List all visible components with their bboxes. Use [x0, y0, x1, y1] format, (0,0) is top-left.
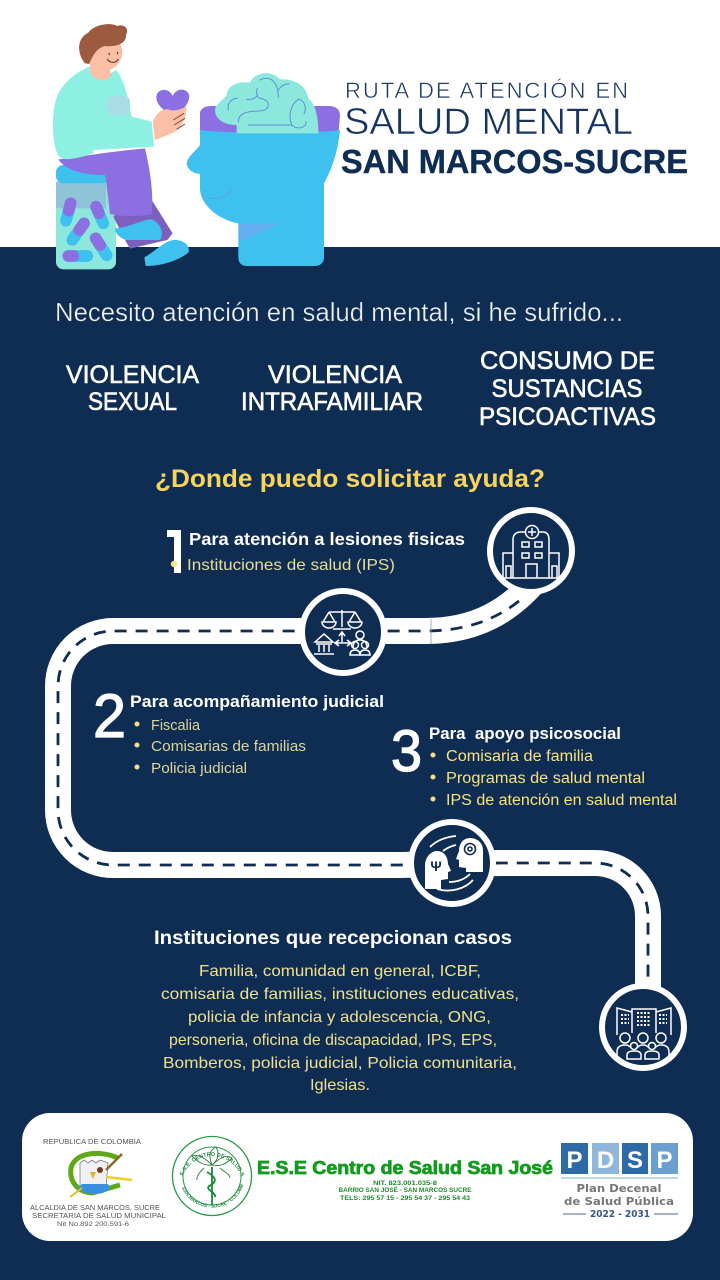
logo: PDSP: de Salud Pública [564, 1195, 674, 1208]
section: receiving institutions [154, 928, 519, 1094]
number 1 [167, 530, 181, 573]
section 2 list: Policia judicial [151, 760, 247, 777]
logo: centro de salud details: NIT. 823.001.035-8 [373, 1180, 437, 1187]
number 3: 3 [391, 719, 422, 784]
logo: centro de salud details: TELS: 295 57 15 - 295 54 37 - 295 54 43 [340, 1195, 470, 1202]
category: violencia sexual: VIOLENCIA [66, 361, 199, 389]
icon: hand [153, 107, 186, 140]
logo: PDSP: P [566, 1147, 583, 1174]
receiving institutions list: Familia, comunidad en general, ICBF, [199, 963, 481, 980]
logo: centro de salud seal: E.S.E. CENTRO DE SALUD SAN JOSÉ [180, 1152, 244, 1176]
section 2 list: Comisarias de familias [151, 738, 306, 755]
logo: PDSP: 2022 - 2031 [590, 1209, 650, 1220]
icon: brain [215, 73, 318, 133]
logo: alcaldia text bottom: Nit No.892 200.591-6 [57, 1221, 129, 1228]
icon: smile [107, 52, 118, 62]
icon: pill jar [56, 165, 116, 269]
section 2 list: Fiscalia [151, 717, 201, 734]
logo: alcaldia text top: REPUBLICA DE COLOMBIA [43, 1137, 141, 1146]
receiving institutions list: policia de infancia y adolescencia, ONG, [188, 1009, 491, 1026]
section 1 item: Instituciones de salud (IPS) [187, 557, 395, 574]
icon: hospital [490, 510, 572, 592]
logo: PDSP: Plan Decenal [576, 1182, 662, 1195]
receiving institutions list: Bomberos, policia judicial, Policia comunitaria, [163, 1055, 517, 1072]
section 3 list: Programas de salud mental [446, 770, 645, 787]
icon: neck shadow [238, 223, 278, 242]
road [58, 575, 648, 1030]
section 3 [391, 719, 677, 809]
section 3 heading: Para apoyo psicosocial [429, 725, 621, 743]
category: violencia sexual: SEXUAL [88, 388, 177, 416]
intro text: Necesito atención en salud mental, si he sufrido... [55, 297, 623, 327]
section 1 [167, 530, 464, 574]
logo: centro de salud seal [172, 1136, 252, 1216]
logo: PDSP [561, 1143, 678, 1220]
heading line 2: SALUD MENTAL [344, 100, 633, 142]
icon: psychology heads [411, 822, 493, 904]
receiving institutions list: Iglesias. [310, 1077, 370, 1094]
section 2 heading: Para acompañamiento judicial [130, 692, 384, 711]
logo: centro de salud name: E.S.E Centro de Salud San José [257, 1157, 553, 1178]
logo: PDSP: D [597, 1147, 614, 1174]
section 3 list: Comisaria de familia [446, 748, 593, 765]
category: violencia intrafamiliar [241, 361, 423, 416]
receiving institutions list: comisaria de familias, instituciones educativas, [161, 986, 519, 1003]
icon: head smile [205, 190, 232, 199]
icon: justice [302, 591, 384, 673]
heading: donde solicitar ayuda: ¿Donde puedo solicitar ayuda? [155, 465, 545, 493]
logo: alcaldia text bottom [30, 1203, 166, 1228]
logo: alcaldia text bottom: ALCALDIA DE SAN MARCOS, SUCRE [30, 1203, 160, 1212]
receiving institutions list [161, 963, 519, 1094]
receiving institutions list: personeria, oficina de discapacidad, IPS, EPS, [169, 1032, 497, 1049]
section 3 list [430, 748, 677, 809]
category: consumo de sustancias: SUSTANCIAS [492, 375, 642, 403]
icon: hair [79, 24, 127, 64]
section 3 list: IPS de atención en salud mental [446, 792, 677, 809]
section 2 list [134, 717, 306, 777]
icon: face [90, 40, 122, 80]
category: violencia sexual [66, 361, 199, 416]
receiving institutions heading: Instituciones que recepcionan casos [154, 928, 512, 949]
title [341, 78, 688, 181]
logo: centro de salud details: BARRIO SAN JOSÉ - SAN MARCOS SUCRE [338, 1185, 472, 1194]
icon: back leg and shoes [113, 187, 189, 266]
icon: chest shading [107, 96, 130, 115]
section 2 [93, 682, 384, 777]
icon: institutions and people [602, 986, 684, 1068]
heading line 3: SAN MARCOS-SUCRE [341, 144, 688, 181]
section 1 heading: Para atención a lesiones fisicas [189, 529, 465, 549]
logo: PDSP: S [627, 1147, 643, 1174]
icon: heart [156, 90, 189, 116]
icon: sweater [53, 67, 154, 159]
icon: head profile [187, 130, 340, 266]
logo: centro de salud details [338, 1180, 472, 1202]
illustration: person seated on pill jar [53, 24, 340, 269]
icon: trousers [58, 148, 152, 216]
logo: alcaldia text bottom: SECRETARIA DE SALUD MUNICIPAL [32, 1211, 166, 1220]
logo: PDSP: P [656, 1147, 673, 1174]
heading line 1: RUTA DE ATENCIÓN EN [345, 78, 628, 103]
category: violencia intrafamiliar: VIOLENCIA [268, 361, 402, 389]
number 2: 2 [93, 682, 126, 750]
logo: alcaldia emblem [70, 1153, 132, 1197]
section 1 bullet [171, 561, 177, 567]
icon: head interior [200, 106, 340, 134]
logo: centro de salud seal: SAN MARCOS - SUCRE - COLOMBIA [182, 1184, 244, 1208]
icon: psychology heads: Ψ [430, 858, 442, 874]
number 1: 1 [165, 519, 189, 586]
category: consumo de sustancias: PSICOACTIVAS [479, 403, 656, 431]
category: consumo de sustancias [479, 347, 656, 431]
category: violencia intrafamiliar: INTRAFAMILIAR [241, 388, 423, 416]
category: consumo de sustancias: CONSUMO DE [480, 347, 655, 375]
